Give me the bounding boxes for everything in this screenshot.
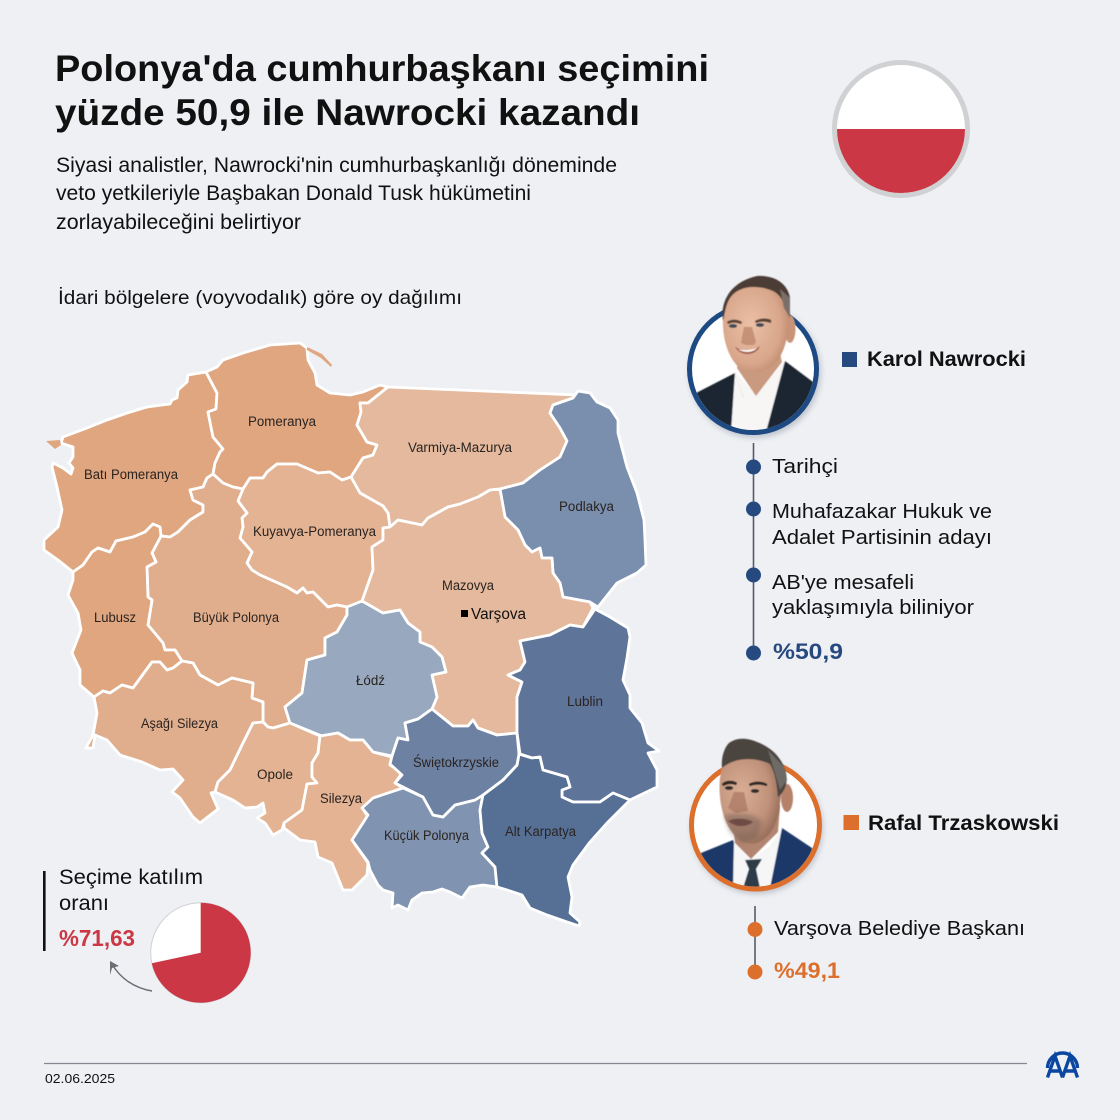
candidate name: Rafal Trzaskowski: Rafal Trzaskowski xyxy=(868,811,1059,835)
footer date: 02.06.2025 xyxy=(45,1072,115,1086)
candidate: Karol Nawrocki portrait xyxy=(689,276,821,440)
timeline: Trzaskowski facts: %49,1 xyxy=(774,958,840,983)
logo: Anadolu Agency xyxy=(1048,1053,1078,1078)
timeline: Nawrocki facts xyxy=(746,443,992,664)
region: Varmiya-Mazurya xyxy=(351,387,577,527)
callout: voter turnout: Seçime katılım xyxy=(59,866,203,889)
candidate name: Karol Nawrocki: Karol Nawrocki xyxy=(867,347,1026,371)
region: Mazovya with Warsaw: Varşova xyxy=(471,606,526,623)
region: Aşağı Silezya: Aşağı Silezya xyxy=(141,716,218,731)
region: Łódź: Łódź xyxy=(356,673,385,688)
region: Lubusz: Lubusz xyxy=(94,610,136,625)
callout: voter turnout xyxy=(43,866,251,1003)
region: Podlakya xyxy=(500,391,646,607)
timeline: Trzaskowski facts: Varşova Belediye Başkanı xyxy=(774,917,1025,940)
timeline: Nawrocki facts: Tarihçi xyxy=(772,455,838,478)
region: Mazovya with Warsaw xyxy=(362,489,593,735)
callout: voter turnout: %71,63 xyxy=(59,925,135,951)
region: Lublin xyxy=(508,609,659,802)
region: Silezya xyxy=(284,733,403,890)
region: Aşağı Silezya xyxy=(86,661,263,823)
timeline: Nawrocki facts: AB'ye mesafeli xyxy=(772,571,914,594)
subtitle: Siyasi analistler, Nawrocki'nin cumhurbaşkanlığı döneminde xyxy=(56,154,617,177)
icon: Polish flag xyxy=(832,60,970,198)
region: Kuyavya-Pomeranya xyxy=(238,464,390,607)
region: Opole xyxy=(215,722,320,835)
region: Küçük Polonya xyxy=(352,788,497,910)
region: Świętokrzyskie: Świętokrzyskie xyxy=(413,755,499,770)
region: Batı Pomeranya: Batı Pomeranya xyxy=(84,467,178,482)
arrow: pie to value xyxy=(110,961,152,991)
subtitle: veto yetkileriyle Başbakan Donald Tusk hükümetini xyxy=(56,182,531,205)
title xyxy=(55,48,709,133)
region: Podlakya: Podlakya xyxy=(559,499,614,514)
region: Lubusz xyxy=(68,524,182,697)
region: Alt Karpatya: Alt Karpatya xyxy=(505,824,576,839)
map of Poland by voivodeship xyxy=(44,343,659,926)
region: Büyük Polonya: Büyük Polonya xyxy=(193,610,279,625)
region: Łódź xyxy=(285,601,446,756)
region: Alt Karpatya xyxy=(480,754,630,926)
timeline: Nawrocki facts: %50,9 xyxy=(773,639,843,664)
region: Świętokrzyskie xyxy=(390,709,519,817)
region: Mazovya with Warsaw: Mazovya xyxy=(442,578,494,593)
candidate: Rafal Trzaskowski portrait xyxy=(691,739,823,895)
map heading: İdari bölgelere (voyvodalık) göre oy dağılımı xyxy=(58,286,462,309)
region: Varmiya-Mazurya: Varmiya-Mazurya xyxy=(408,440,512,455)
pie chart: turnout 71.63% xyxy=(151,903,251,1003)
region: Batı Pomeranya xyxy=(44,372,223,572)
region: Küçük Polonya: Küçük Polonya xyxy=(384,828,469,843)
timeline: Trzaskowski facts xyxy=(748,906,1025,983)
timeline: Nawrocki facts: Muhafazakar Hukuk ve xyxy=(772,500,992,523)
region: Silezya: Silezya xyxy=(320,791,362,806)
region: Lublin: Lublin xyxy=(567,694,603,709)
callout: voter turnout: oranı xyxy=(59,892,109,915)
region: Kuyavya-Pomeranya: Kuyavya-Pomeranya xyxy=(253,524,376,539)
region: Büyük Polonya xyxy=(147,474,347,728)
timeline: Nawrocki facts: yaklaşımıyla biliniyor xyxy=(772,596,974,619)
title: yüzde 50,9 ile Nawrocki kazandı xyxy=(55,92,640,133)
region: Opole: Opole xyxy=(257,767,293,782)
title: Polonya'da cumhurbaşkanı seçimini xyxy=(55,48,709,89)
region: Pomeranya: Pomeranya xyxy=(248,414,316,429)
region: Pomeranya xyxy=(206,343,388,489)
timeline: Nawrocki facts: Adalet Partisinin adayı xyxy=(772,526,992,549)
subtitle: zorlayabileceğini belirtiyor xyxy=(56,211,301,234)
subtitle xyxy=(56,154,617,234)
